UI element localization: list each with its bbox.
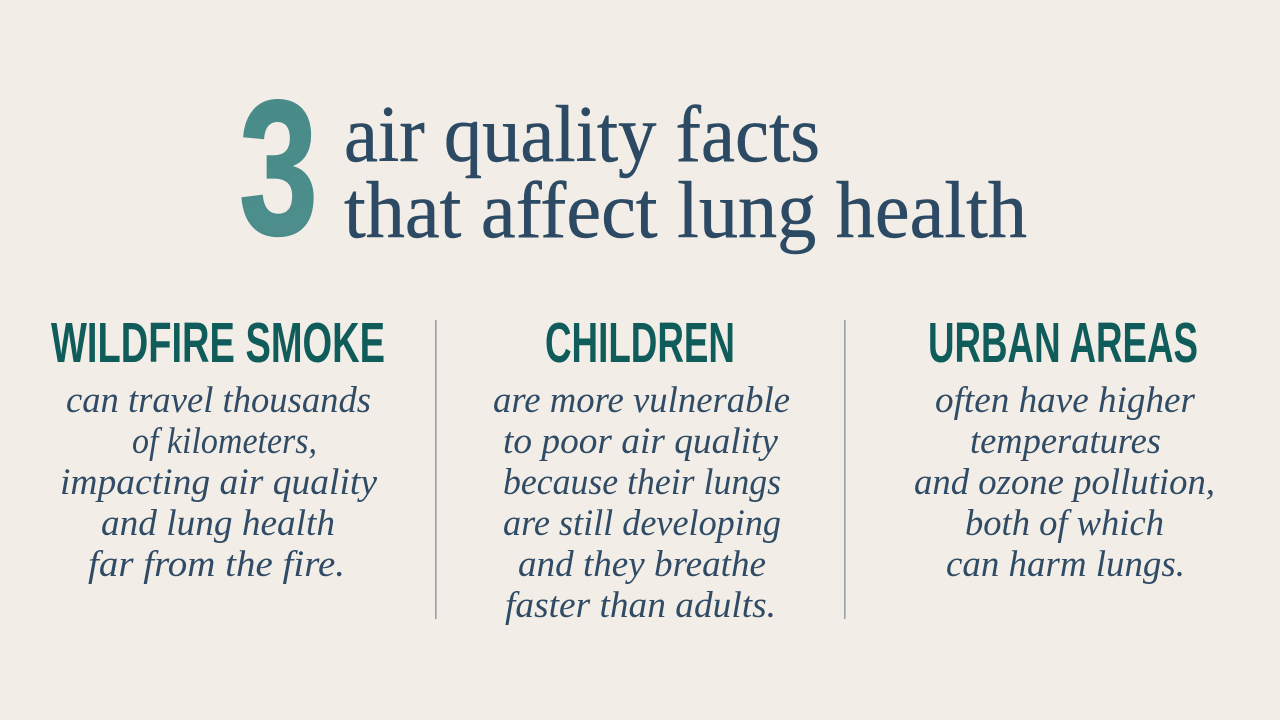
title xyxy=(344,91,1027,255)
text block: wildfire smoke: far from the fire. xyxy=(88,544,345,585)
text block: urban areas: both of which xyxy=(965,503,1164,544)
text block: children: because their lungs xyxy=(503,462,781,503)
panel: children xyxy=(493,311,790,626)
text block: children xyxy=(493,380,790,626)
title: air quality facts xyxy=(344,91,820,179)
panel: wildfire smoke xyxy=(51,311,385,585)
text block: urban areas: often have higher xyxy=(935,380,1196,421)
text block: wildfire smoke: of kilometers, xyxy=(132,421,317,462)
text block: wildfire smoke xyxy=(60,380,378,585)
panel: urban areas xyxy=(914,311,1215,585)
text block: wildfire smoke: and lung health xyxy=(101,503,335,544)
text block: urban areas: temperatures xyxy=(970,421,1161,462)
text block: children: are still developing xyxy=(503,503,781,544)
heading: children: CHILDREN xyxy=(545,311,735,375)
title: that affect lung health xyxy=(344,167,1027,255)
text block: wildfire smoke: can travel thousands xyxy=(66,380,371,421)
text block: children: to poor air quality xyxy=(503,421,779,462)
text block: urban areas: and ozone pollution, xyxy=(914,462,1215,503)
text block: children: faster than adults. xyxy=(505,585,776,626)
text block: children: and they breathe xyxy=(518,544,766,585)
text block: urban areas: can harm lungs. xyxy=(946,544,1185,585)
heading: wildfire smoke: WILDFIRE SMOKE xyxy=(51,311,385,375)
text block: urban areas xyxy=(914,380,1215,585)
text block: wildfire smoke: impacting air quality xyxy=(60,462,378,503)
text block: children: are more vulnerable xyxy=(493,380,790,421)
big number 3: 3 xyxy=(239,60,318,275)
